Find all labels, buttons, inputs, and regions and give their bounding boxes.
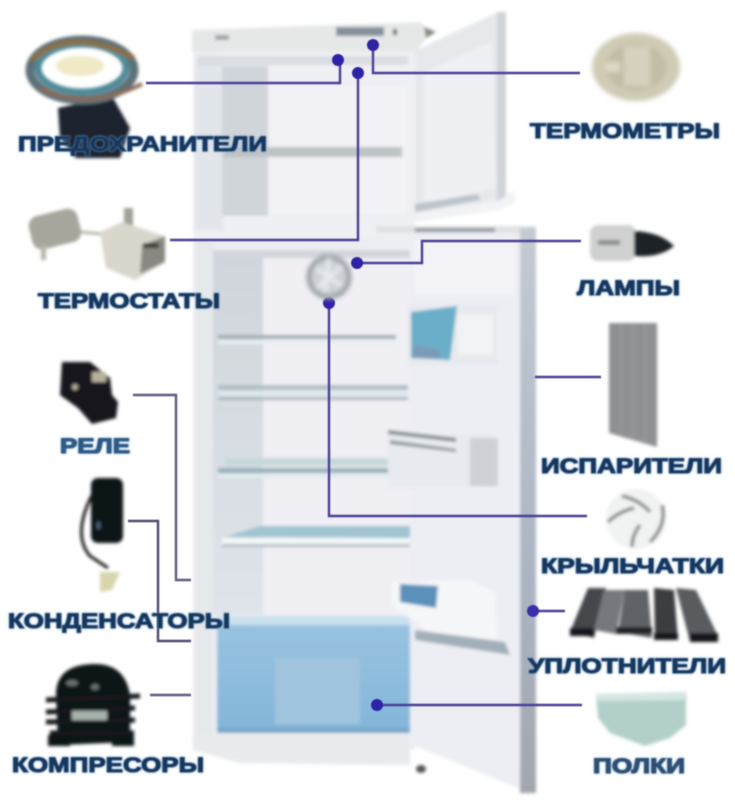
control panel: [192, 22, 436, 52]
door bin: lower: [392, 580, 510, 655]
label: КОНДЕНСАТОРЫ: КОНДЕНСАТОРЫ: [8, 610, 230, 633]
shelf 3: [218, 458, 410, 478]
door bin: middle: [388, 430, 498, 488]
icon: door seals: [570, 588, 718, 642]
dot: fans: [323, 297, 335, 309]
icon: shelf glass: [596, 692, 686, 746]
icon: impeller: [606, 489, 666, 549]
label: ЛАМПЫ: ЛАМПЫ: [577, 277, 680, 300]
crisper drawer: [217, 616, 410, 733]
icon: fan inside fridge: [309, 257, 349, 297]
label: ТЕРМОМЕТРЫ: ТЕРМОМЕТРЫ: [530, 120, 720, 143]
label: ПРЕДОХРАНИТЕЛИ: ПРЕДОХРАНИТЕЛИ: [18, 133, 267, 156]
icon: evaporator: [609, 323, 657, 447]
shelf 4: [222, 526, 410, 547]
dot: thermometers: [367, 39, 379, 51]
dot: seals: [527, 605, 539, 617]
freezer compartment: [193, 50, 415, 240]
dot: fuses: [332, 54, 344, 66]
line: compressors: [150, 694, 191, 696]
label: КРЫЛЬЧАТКИ: КРЫЛЬЧАТКИ: [541, 555, 724, 578]
main compartment: [193, 238, 415, 750]
icon: thermometer: [592, 33, 680, 101]
label: КОМПРЕСОРЫ: КОМПРЕСОРЫ: [12, 754, 204, 777]
label: УПЛОТНИТЕЛИ: УПЛОТНИТЕЛИ: [528, 655, 726, 678]
label: ПОЛКИ: ПОЛКИ: [593, 755, 685, 778]
label: ТЕРМОСТАТЫ: ТЕРМОСТАТЫ: [38, 290, 220, 313]
line: shelves: [377, 704, 582, 706]
line: lamps: [357, 241, 581, 263]
dot: shelves: [371, 699, 383, 711]
shelf 1: [218, 335, 396, 344]
line: relays: [133, 395, 191, 580]
line: fuses: [146, 60, 340, 83]
line: fans: [329, 303, 587, 516]
line: thermometers: [373, 46, 580, 73]
lower door: [376, 226, 536, 793]
dot: thermostats: [352, 67, 364, 79]
icon: capacitor: [81, 478, 123, 592]
line: seals: [532, 610, 565, 612]
label: РЕЛЕ: РЕЛЕ: [60, 435, 130, 458]
connector dots: [323, 39, 539, 711]
label: ИСПАРИТЕЛИ: ИСПАРИТЕЛИ: [541, 455, 722, 478]
dot: lamps: [351, 257, 363, 269]
icon: relay: [60, 362, 118, 424]
icon: fuses: [30, 40, 142, 158]
line: capacitors: [128, 521, 191, 641]
plinth: [193, 735, 410, 765]
shelf 2: [218, 385, 408, 400]
foot: [416, 765, 426, 773]
line: thermostats: [170, 73, 358, 240]
connector lines: [128, 46, 601, 705]
icon: lamp: [590, 225, 674, 261]
icon: thermostats: [27, 206, 165, 280]
refrigerator: [192, 12, 536, 793]
icon: compressor: [46, 664, 140, 746]
upper door: [412, 12, 516, 222]
line: evaporators: [535, 376, 601, 378]
door bin: top: [408, 305, 498, 365]
